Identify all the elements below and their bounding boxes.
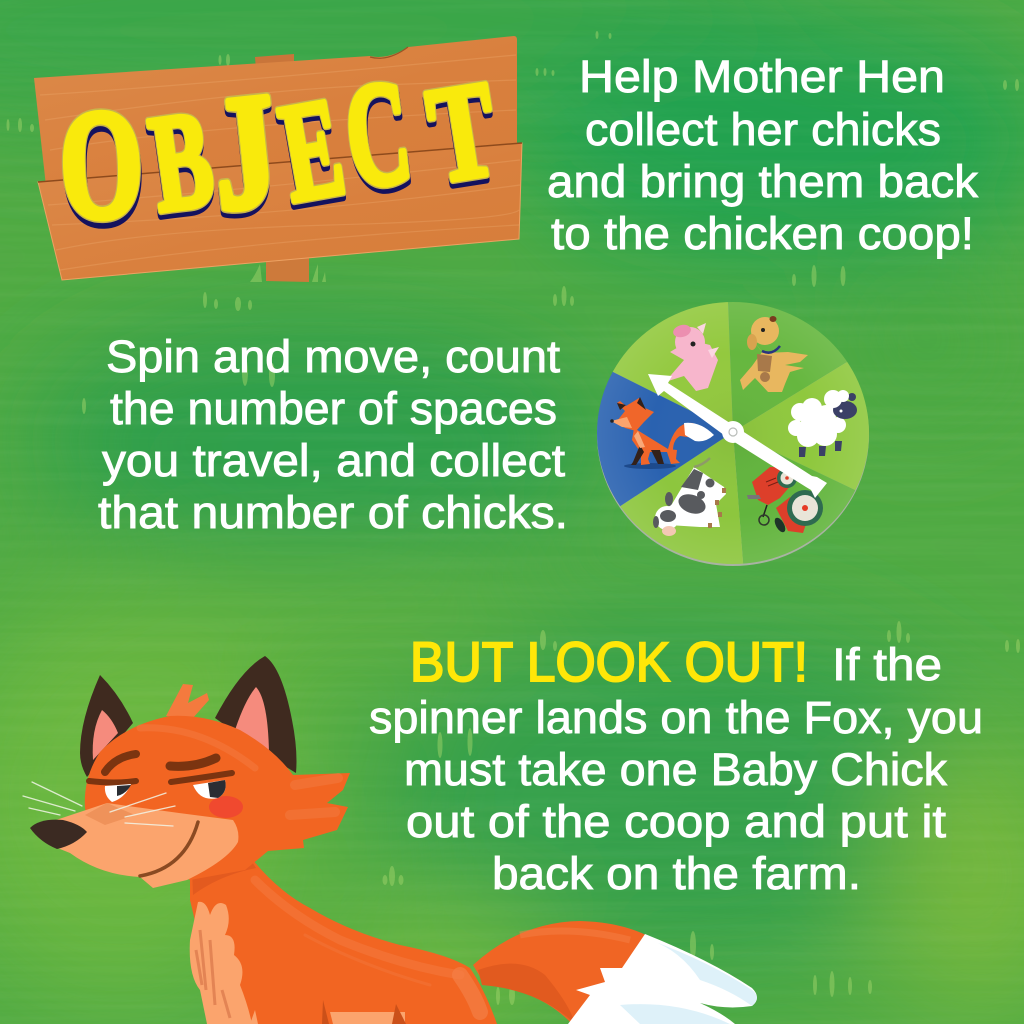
letter O: O: [57, 76, 146, 252]
wood grain: [40, 55, 520, 270]
right eye: [193, 780, 226, 799]
letter C: C: [338, 55, 420, 225]
text block: objective: [547, 51, 979, 259]
letter B: B: [142, 82, 221, 242]
spinner animal: pig: [665, 323, 719, 391]
sign posts: [255, 54, 309, 282]
eyebrows and eyelids: [89, 754, 232, 782]
upper plank: [34, 36, 517, 186]
head tuft: [166, 684, 209, 719]
text block: spin and move: you travel, and collect: [102, 435, 566, 486]
letter J: J: [204, 65, 285, 250]
fox nose: [30, 820, 87, 849]
left eye: [105, 784, 131, 802]
head highlights: [140, 728, 338, 815]
spinner animal: dog: [740, 316, 808, 392]
letter E: E: [270, 74, 354, 237]
spinner animal: tractor: [747, 467, 823, 534]
wooden sign with OBJECT title: [34, 36, 522, 282]
right ear: [215, 656, 296, 773]
title letters: OBJECT: [57, 50, 506, 258]
spinner animal: sheep: [788, 390, 857, 457]
text block: objective: to the chicken coop!: [551, 208, 974, 259]
letter J: J: [204, 60, 285, 245]
lower plank: [38, 143, 522, 280]
spinner animal: cow: [653, 458, 726, 536]
warning body text: [369, 639, 983, 899]
letter E: E: [270, 69, 354, 232]
letter B: B: [142, 87, 221, 247]
leg shadows and belly: [250, 1010, 405, 1024]
letter C: C: [337, 50, 419, 220]
wheel segments: [597, 302, 869, 564]
left ear: [80, 675, 133, 777]
letter T: T: [419, 53, 506, 212]
warning body text: If the: [832, 639, 942, 690]
spinner arrow pointer: [648, 374, 827, 498]
text block: objective: collect her chicks: [585, 104, 941, 155]
warning body text: spinner lands on the Fox, you: [369, 692, 983, 743]
fox muzzle: [50, 803, 238, 888]
fur highlights: [255, 880, 480, 1012]
spinner animal: fox: [610, 397, 714, 469]
letter T: T: [419, 53, 506, 212]
letter O: O: [57, 76, 146, 252]
chest fluff: [190, 902, 252, 1024]
whiskers: [23, 782, 175, 826]
letter C: C: [337, 50, 419, 220]
text block: but look out warning: [369, 630, 983, 899]
fox tail: [473, 921, 757, 1024]
text block: spin and move: Spin and move, count: [106, 331, 561, 382]
fox mouth: [140, 822, 198, 876]
letter O: O: [58, 82, 147, 258]
large fox illustration: [23, 656, 757, 1024]
letter E: E: [270, 69, 354, 232]
letter T: T: [419, 58, 506, 217]
heading: but look out: BUT LOOK OUT!: [410, 630, 808, 693]
warning body text: must take one Baby Chick: [404, 744, 948, 795]
text block: objective: and bring them back: [547, 156, 979, 207]
letter B: B: [142, 82, 221, 242]
text block: spin and move: the number of spaces: [110, 383, 557, 434]
text block: spin and move: that number of chicks.: [98, 487, 568, 538]
cheek blush: [209, 796, 243, 818]
fox head: [85, 716, 350, 880]
text block: objective: Help Mother Hen: [579, 51, 945, 102]
letter J: J: [204, 60, 285, 245]
warning body text: out of the coop and put it: [406, 796, 947, 847]
text block: spin and move: [98, 331, 568, 538]
fox body: [190, 850, 497, 1024]
warning body text: back on the farm.: [492, 848, 861, 899]
spinner wheel: [597, 302, 869, 566]
